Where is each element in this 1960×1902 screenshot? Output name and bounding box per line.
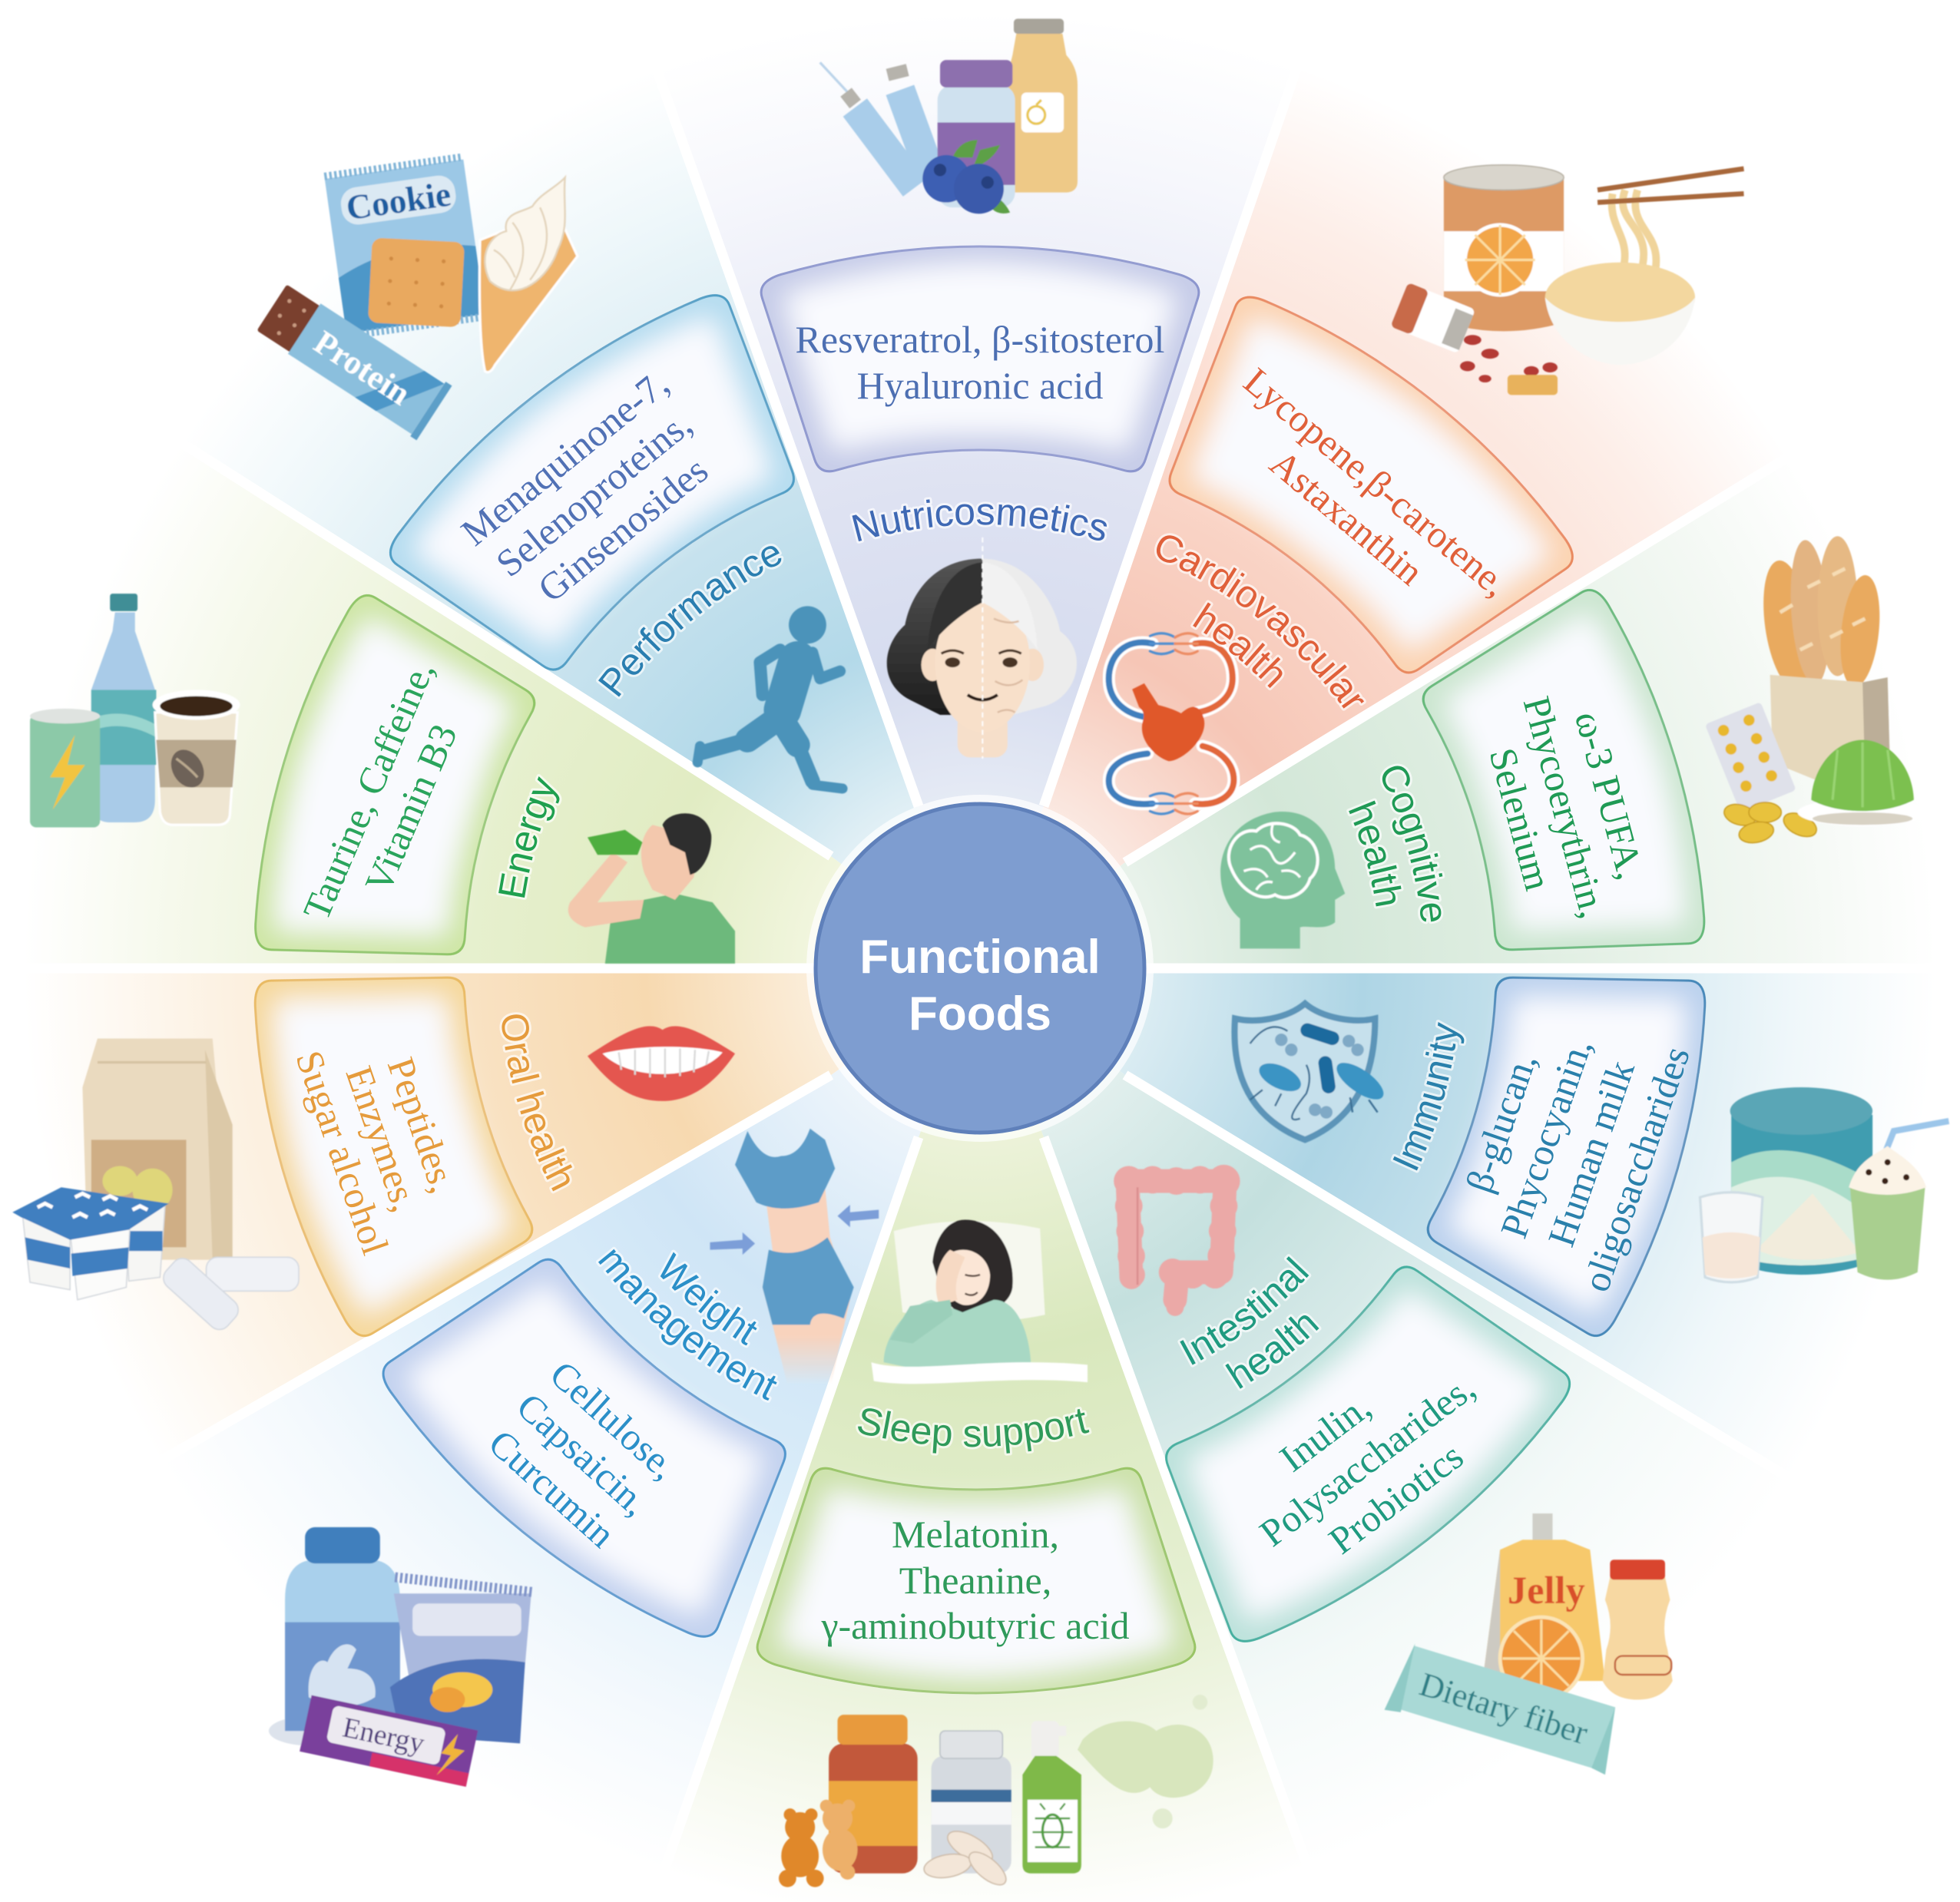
icon: runner <box>697 606 843 789</box>
card: intestinal ingredients <box>1118 1228 1594 1670</box>
panel: immunity <box>1234 930 1948 1345</box>
text: weight ingredients: Capsaicin, <box>508 1384 657 1524</box>
text: oral ingredients: Peptides, <box>379 1052 465 1198</box>
heading: Cognitive health: Cognitivehealth <box>1346 763 1445 925</box>
card: weight ingredients <box>359 1220 833 1665</box>
text: cardiovascular ingredients: Astaxanthin <box>1262 442 1432 594</box>
heading: Weight management: Weightmanagement <box>581 1210 810 1418</box>
icon: shield with microbes <box>1234 1004 1389 1140</box>
icon: ageing face <box>887 538 1077 759</box>
panel: cardiovascular health <box>1109 165 1744 814</box>
panel: weight management <box>269 1129 879 1787</box>
illustration: cookie, protein bar and ice cream: Protein <box>307 323 417 412</box>
panel: cognitive health <box>1220 536 1928 997</box>
panel: sleep support <box>757 1220 1213 1890</box>
icon: man drinking <box>568 813 735 964</box>
center hub: Functional Foods: Foods <box>909 987 1051 1040</box>
illustration: protein powder, snacks and energy bar <box>269 1527 534 1787</box>
illustration: nutricosmetic products <box>820 18 1078 213</box>
text: performance ingredients: Ginsenosides <box>530 448 716 610</box>
text: immunity ingredients: oligosaccharides <box>1574 1041 1698 1297</box>
text: nutricosmetics ingredients: Hyaluronic acid <box>857 364 1103 407</box>
text: performance ingredients: Menaquinone-7, <box>453 362 677 554</box>
text: weight ingredients: Cellulose, <box>542 1352 686 1487</box>
text: intestinal ingredients: Inulin, <box>1272 1384 1379 1480</box>
card: energy ingredients <box>232 586 551 1002</box>
text: intestinal ingredients: Polysaccharides, <box>1252 1366 1483 1555</box>
text: immunity ingredients: Human milk <box>1539 1055 1643 1252</box>
panel: nutricosmetics <box>761 18 1199 759</box>
center hub: Functional Foods: Functional <box>859 931 1101 984</box>
text: energy ingredients: Taurine, Caffeine, <box>294 654 442 926</box>
panel: intestinal health <box>1114 1165 1673 1777</box>
text: nutricosmetics ingredients: Resveratrol, β-sitosterol <box>796 318 1164 361</box>
illustration: jelly, yogurt drink and fiber bar: Jelly <box>1508 1569 1585 1612</box>
illustration: sleep supplements <box>779 1695 1213 1890</box>
card: cardiovascular ingredients <box>1121 268 1597 712</box>
text: sleep ingredients: Melatonin, <box>892 1513 1059 1556</box>
text: oral ingredients: Enzymes, <box>337 1060 427 1217</box>
panel: oral health <box>12 930 735 1345</box>
heading: Intestinal health: Intestinal health <box>1177 1254 1321 1391</box>
card: immunity ingredients <box>1412 930 1729 1345</box>
card: oral ingredients <box>231 930 548 1345</box>
text: cognitive ingredients: Phycoerythrin, <box>1515 692 1615 922</box>
illustration: bread, softgels and jelly <box>1705 536 1928 845</box>
heading: Performance: Performance <box>581 519 796 710</box>
text: immunity ingredients: β-glucan, <box>1457 1047 1544 1198</box>
card: performance ingredients <box>366 266 842 709</box>
illustration: protein powder, snacks and energy bar: Energy <box>339 1712 427 1760</box>
text: sleep ingredients: γ-aminobutyric acid <box>820 1604 1130 1647</box>
icon: circulatory loop and heart <box>1109 633 1233 814</box>
heading: Cardiovascular health: Cardiovascularhealth <box>1154 533 1366 711</box>
illustration: milk powder and shake <box>1700 1087 1948 1282</box>
icon: smiling lips <box>588 1026 735 1101</box>
text: immunity ingredients: Phycocyanin, <box>1492 1033 1600 1243</box>
heading: Immunity: Immunity <box>1390 1020 1467 1173</box>
heading: Sleep support: Sleep support <box>856 1406 1092 1456</box>
illustration: cookie, protein bar and ice cream: Cookie <box>344 174 453 227</box>
illustration: jelly, yogurt drink and fiber bar: Dietary fiber <box>1415 1665 1592 1752</box>
illustration: cookie, protein bar and ice cream <box>254 157 578 440</box>
panel: performance <box>254 157 843 789</box>
illustration: energy drinks and coffee <box>30 594 240 827</box>
text: oral ingredients: Sugar alcohol <box>287 1045 397 1260</box>
text: cardiovascular ingredients: Lycopene,β-carotene, <box>1236 359 1517 605</box>
text: performance ingredients: Selenoproteins, <box>488 402 700 585</box>
illustration: canned and noodle products <box>1390 165 1744 395</box>
card: sleep ingredients <box>757 1468 1195 1693</box>
icon: head with brain <box>1220 812 1345 948</box>
heading: Energy: Energy <box>486 769 567 907</box>
icon: sleeping woman <box>871 1220 1088 1384</box>
heading: Nutricosmetics: Nutricosmetics <box>849 498 1109 544</box>
text: intestinal ingredients: Probiotics <box>1321 1434 1471 1563</box>
icon: intestine <box>1114 1165 1240 1316</box>
heading: Oral health: Oral health <box>483 1004 588 1200</box>
text: cognitive ingredients: Selenium <box>1481 743 1560 895</box>
illustration: jelly, yogurt drink and fiber bar <box>1385 1513 1673 1777</box>
text: sleep ingredients: Theanine, <box>899 1559 1051 1602</box>
illustration: bag, yogurt and gum <box>12 1039 299 1334</box>
icon: slim waist with arrows <box>710 1129 879 1384</box>
text: weight ingredients: Curcumin <box>481 1421 624 1556</box>
text: energy ingredients: Vitamin B3 <box>356 718 465 898</box>
card: cognitive ingredients <box>1406 580 1728 997</box>
card: nutricosmetics ingredients <box>761 246 1199 471</box>
panel: energy <box>30 586 735 1002</box>
text: cognitive ingredients: ω-3 PUFA, <box>1567 706 1653 884</box>
center hub: Functional Foods <box>806 795 1154 1142</box>
